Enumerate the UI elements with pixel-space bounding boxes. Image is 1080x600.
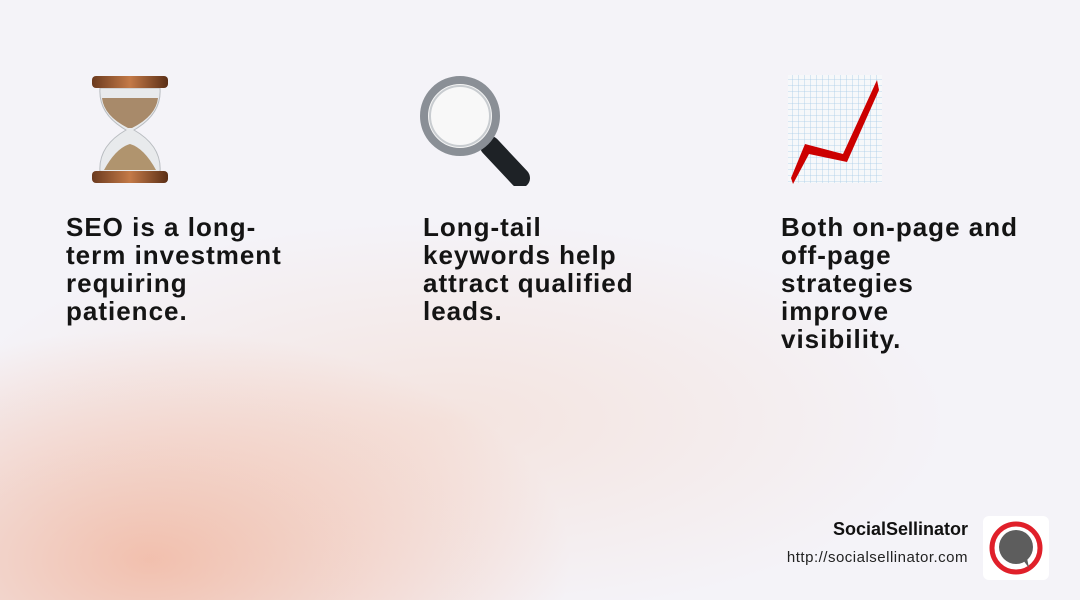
text: point 1: term investment [66,240,282,270]
text: point 1 [66,212,282,326]
logo [983,516,1049,580]
text: point 2: leads. [423,296,503,326]
text: point 3: improve [781,296,889,326]
icon: magnifier [420,76,530,186]
text: point 2: keywords help [423,240,617,270]
text: point 3 [781,212,1018,354]
text: point 2: Long-tail [423,212,542,242]
text: point 3: off-page [781,240,892,270]
brand url: http://socialsellinator.com [787,549,968,566]
icon: chart [788,75,882,184]
text: point 2 [423,212,634,326]
text: point 1: SEO is a long- [66,212,256,242]
text: point 2: attract qualified [423,268,634,298]
text: point 3: visibility. [781,324,901,354]
text: point 1: patience. [66,296,188,326]
text: point 3: Both on-page and [781,212,1018,242]
text: point 3: strategies [781,268,914,298]
icon: hourglass [92,76,168,183]
brand name: SocialSellinator [833,519,968,539]
text: point 1: requiring [66,268,188,298]
